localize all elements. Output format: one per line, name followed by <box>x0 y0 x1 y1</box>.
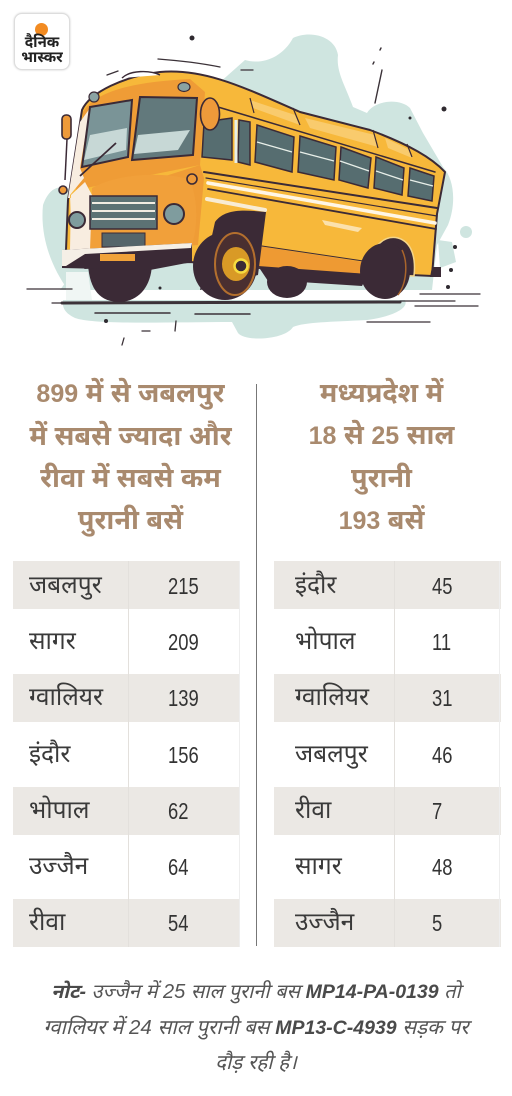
mirrors <box>59 98 220 194</box>
grille <box>90 196 157 247</box>
table: right <box>274 561 501 947</box>
table: right: 48 <box>432 854 452 880</box>
roof ridges <box>250 98 412 157</box>
table: left <box>13 561 240 947</box>
note: दौड़ रही है। <box>215 1051 297 1074</box>
logo: Dainik Bhaskar <box>14 13 70 70</box>
mint paint splashes <box>42 35 472 339</box>
white cab corner <box>68 108 90 250</box>
logo text: दैनिक <box>25 34 59 51</box>
specks <box>104 36 457 323</box>
note: ग्वालियर में 24 साल पुरानी बस MP13-C-4939 सड़क पर <box>43 1016 469 1039</box>
table: right: सागर <box>295 853 342 880</box>
heading: left: पुरानी बसें <box>78 505 183 535</box>
table: right: रीवा <box>295 797 331 824</box>
table: left: जबलपुर <box>29 572 102 599</box>
table: right: 11 <box>432 629 451 655</box>
rear wheel <box>360 237 441 299</box>
logo text: भास्कर <box>21 49 63 66</box>
top marker lamps <box>89 82 190 102</box>
windscreen reflections <box>84 128 190 160</box>
table: right: भोपाल <box>295 628 355 655</box>
table: left: सागर <box>29 628 76 655</box>
table: left: 209 <box>168 629 199 655</box>
table: left: भोपाल <box>29 797 89 824</box>
table: right: 46 <box>432 742 452 768</box>
table: right: जबलपुर <box>295 741 368 768</box>
heading: left: 899 में से जबलपुर <box>36 378 225 408</box>
heading: right <box>309 378 455 535</box>
table: left: 139 <box>168 685 199 711</box>
table: right: 7 <box>432 798 442 824</box>
table: left: 62 <box>168 798 188 824</box>
orange cab front <box>76 79 205 255</box>
table: left: इंदौर <box>29 741 70 768</box>
heading: left: रीवा में सबसे कम <box>40 463 221 493</box>
table: right: उज्जैन <box>295 909 354 936</box>
heading: right: 18 से 25 साल <box>309 420 454 450</box>
road lines <box>27 48 480 345</box>
table: left: उज्जैन <box>29 853 88 880</box>
illustration: yellow school bus <box>26 34 481 346</box>
table: right: 5 <box>432 910 442 936</box>
heading: left <box>29 378 232 537</box>
lower side orange band <box>258 246 370 274</box>
headlights <box>69 204 184 228</box>
windscreens <box>82 97 197 167</box>
bus body <box>66 71 445 276</box>
undercarriage and middle wheel <box>258 266 368 298</box>
window light band <box>236 120 433 186</box>
bumper and front wheel <box>62 243 192 302</box>
table: right: इंदौर <box>295 572 336 599</box>
logo text <box>21 33 63 66</box>
note: नोट- उज्जैन में 25 साल पुरानी बस MP14-PA-0139 तो <box>51 981 461 1003</box>
wheel arch and front wheel <box>193 211 266 300</box>
table: right: 31 <box>432 685 452 711</box>
side windows <box>202 118 434 201</box>
table: left: 215 <box>168 573 199 599</box>
logo sun <box>35 23 48 36</box>
heading: right: पुरानी <box>351 463 412 493</box>
roof highlight <box>250 100 412 158</box>
heading: right: मध्यप्रदेश में <box>320 378 443 408</box>
heading: left: में सबसे ज्यादा और <box>29 421 232 451</box>
table: right: 45 <box>432 573 452 599</box>
table: left: 54 <box>168 910 188 936</box>
divider <box>256 384 257 946</box>
note <box>43 980 472 1074</box>
heading: right: 193 बसें <box>339 505 424 535</box>
side stripes <box>204 107 437 262</box>
table: left: 156 <box>168 742 199 768</box>
table: left: ग्वालियर <box>29 684 103 711</box>
table: left: रीवा <box>29 909 65 936</box>
table: left: 64 <box>168 854 188 880</box>
table: right: ग्वालियर <box>295 684 369 711</box>
